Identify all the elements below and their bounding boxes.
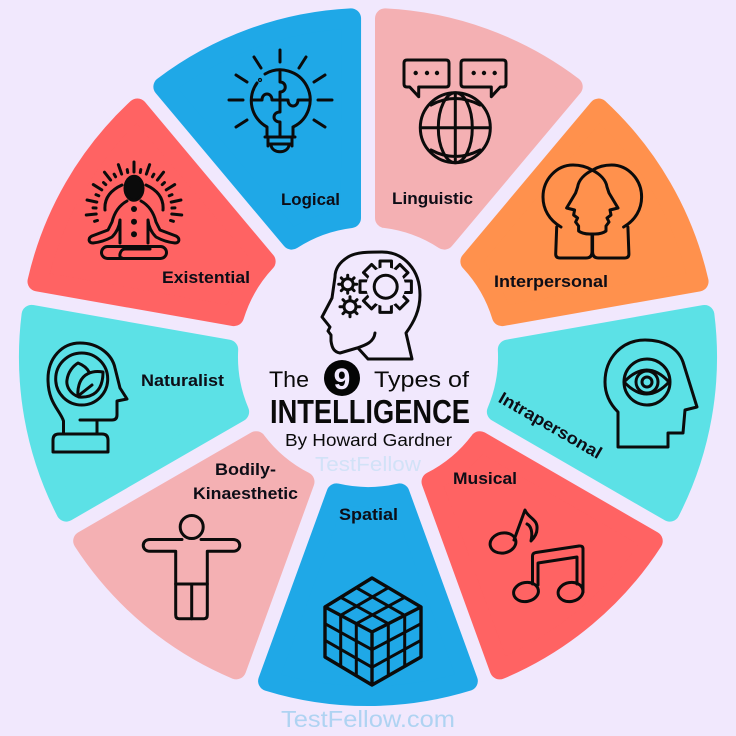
- icon: music notes: [488, 510, 584, 604]
- label: Bodily-Kinaesthetic: Kinaesthetic: [193, 484, 298, 503]
- icon: head with eye: [605, 340, 697, 447]
- subtitle: By Howard Gardner: By Howard Gardner: [285, 430, 452, 450]
- icon: meditating figure: [86, 162, 182, 258]
- title: Types of: Types of: [374, 367, 470, 392]
- segment: bodily-kinaesthetic: [60, 397, 312, 669]
- icon: puzzle light bulb: [229, 50, 332, 152]
- icon: rubik cube: [325, 578, 421, 685]
- icon: head with gears: [322, 252, 420, 359]
- label: Intrapersonal: Intrapersonal: [495, 388, 605, 463]
- panel: naturalist: [0, 238, 258, 512]
- title: INTELLIGENCE: INTELLIGENCE: [270, 393, 470, 430]
- label: Spatial: Spatial: [339, 505, 398, 524]
- segment: intrapersonal: [487, 315, 736, 538]
- label: Logical: Logical: [281, 190, 340, 209]
- label: Interpersonal: Interpersonal: [494, 272, 608, 291]
- title block: [269, 360, 470, 450]
- watermark: center: TestFellow: [315, 454, 422, 476]
- label: Bodily-Kinaesthetic: Bodily-: [215, 460, 276, 479]
- segment: naturalist: [0, 238, 258, 512]
- icon: head with leaf: [48, 343, 127, 452]
- panel: interpersonal: [456, 109, 736, 399]
- segment: existential: [37, 97, 288, 320]
- label: Linguistic: Linguistic: [392, 189, 473, 208]
- panel: linguistic: [385, 18, 573, 240]
- panel: spatial: [216, 473, 468, 736]
- label: Naturalist: Naturalist: [141, 371, 224, 390]
- icon: standing figure: [143, 516, 240, 619]
- watermark: footer: TestFellow.com: [281, 706, 455, 732]
- panel: logical: [163, 0, 449, 256]
- panel: bodily-kinaesthetic: [60, 397, 312, 669]
- segment: interpersonal: [456, 109, 736, 399]
- panel: musical: [367, 430, 653, 704]
- segment: musical: [367, 430, 653, 704]
- segment: spatial: [216, 473, 468, 736]
- icon: speech bubbles and globe: [404, 60, 506, 163]
- icon: two facing heads: [543, 165, 642, 258]
- segment: logical: [163, 0, 449, 256]
- panel: existential: [37, 97, 288, 320]
- label: Existential: Existential: [162, 268, 250, 287]
- segment: linguistic: [385, 18, 573, 240]
- panel: intrapersonal: [487, 315, 736, 538]
- label: Musical: Musical: [453, 469, 517, 488]
- badge: number 9: 9: [334, 363, 350, 396]
- label: Bodily-Kinaesthetic: [193, 460, 298, 503]
- badge: number 9: [324, 360, 360, 396]
- title: The: The: [269, 367, 309, 392]
